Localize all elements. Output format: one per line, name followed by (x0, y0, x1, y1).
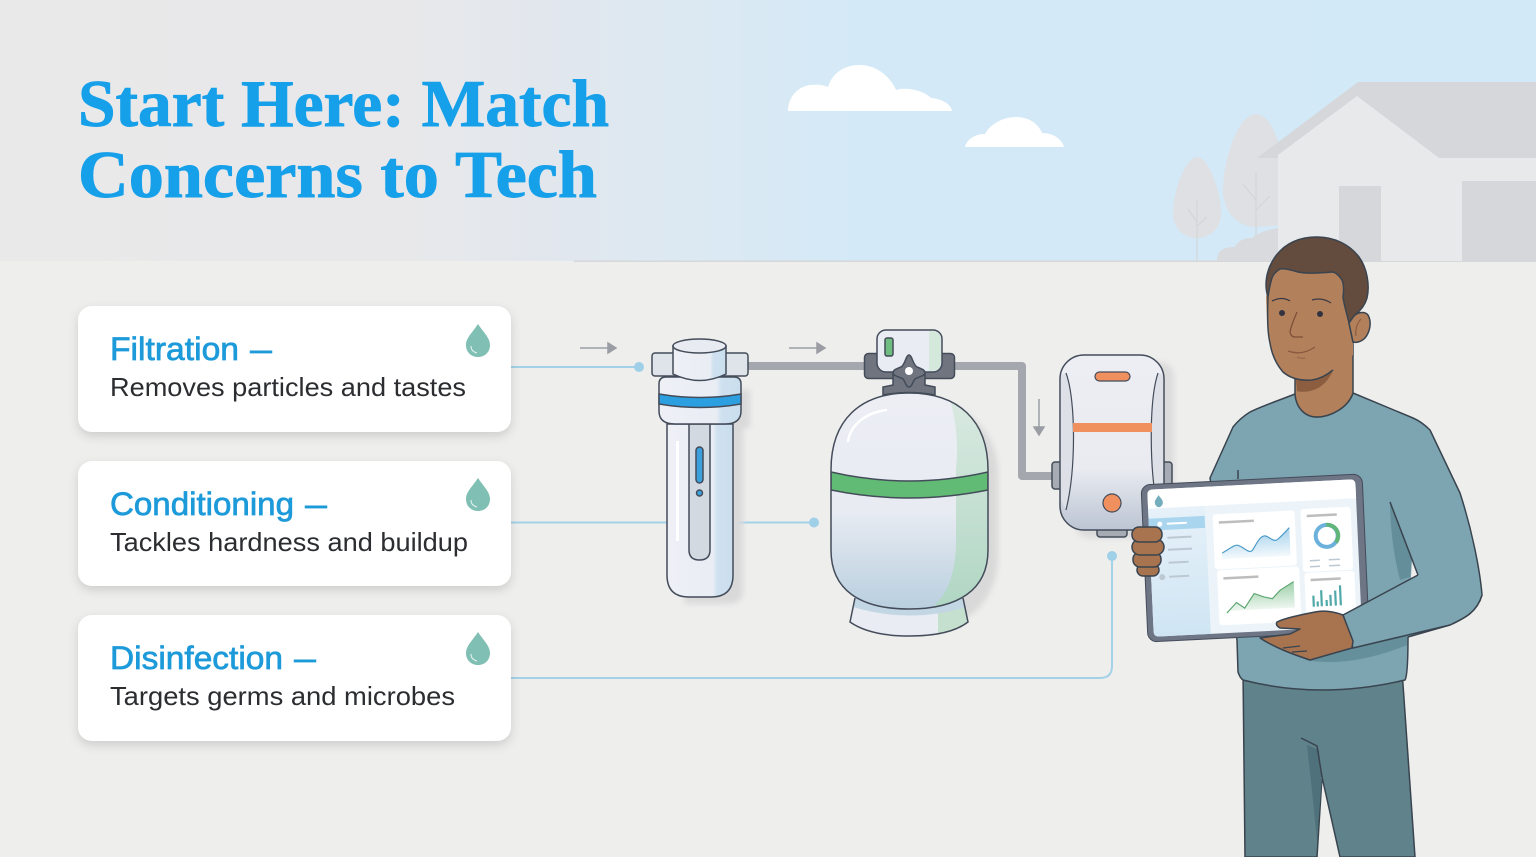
line chart card: green (1217, 566, 1301, 625)
filter cartridge (652, 339, 750, 604)
card: conditioning (78, 461, 511, 586)
tree: tall (1223, 114, 1285, 240)
filter ports (652, 353, 748, 376)
unit orange pill (1095, 372, 1130, 381)
tank highlight (848, 410, 886, 441)
connector: conditioning to softener (511, 518, 819, 528)
unit shadow (1075, 362, 1174, 538)
neck (1295, 335, 1353, 417)
ear inner (1356, 319, 1361, 336)
arrow: down to UV unit (1034, 399, 1044, 435)
house wall (1278, 96, 1536, 261)
cloud: small (965, 117, 1064, 147)
icon: water drop (466, 632, 490, 665)
card heading: — (250, 331, 272, 367)
hair (1266, 237, 1368, 323)
unit body (1060, 355, 1164, 530)
tablet logo drop (1154, 495, 1163, 507)
person (1210, 237, 1482, 857)
icon: water drop (466, 478, 490, 511)
tank base (848, 596, 970, 638)
bar chart card (1304, 571, 1356, 618)
unit bottom tab (1097, 525, 1127, 537)
right hand (1260, 611, 1353, 660)
card body: Targets germs and microbes (110, 681, 455, 711)
bush (1217, 228, 1280, 261)
title: Concerns to Tech (78, 138, 597, 212)
softener tank (831, 330, 998, 638)
card: disinfection (78, 615, 511, 741)
unit orange button (1103, 494, 1121, 512)
tank shadow (950, 405, 998, 625)
unit contour lines (1066, 373, 1158, 510)
card heading: Filtration (110, 331, 239, 367)
tablet sidebar (1148, 506, 1211, 637)
title: Start Here: Match (78, 67, 609, 141)
filter body (667, 424, 733, 597)
tank body (831, 393, 990, 609)
line chart card: blue (1212, 510, 1297, 570)
unit side panels (1061, 373, 1163, 510)
left hand (1132, 527, 1164, 576)
sweater (1210, 393, 1482, 690)
sweater fold (1237, 470, 1239, 479)
neck shadow (1296, 370, 1333, 392)
unit side tabs (1052, 462, 1172, 489)
cloud: large (788, 65, 952, 111)
filter cap (673, 346, 726, 380)
face (1266, 258, 1353, 380)
shadow below hand (1305, 636, 1407, 662)
face outline (1268, 297, 1353, 380)
right arm sleeve (1343, 575, 1482, 648)
house and trees in the background (1173, 82, 1536, 261)
unit orange band (1073, 423, 1152, 432)
tablet header (1147, 479, 1356, 509)
UV unit (1052, 355, 1174, 538)
arrow: into filter (580, 343, 616, 353)
ear (1349, 312, 1370, 342)
arrow: into softener (789, 343, 825, 353)
gap between arm and torso (1411, 558, 1418, 578)
filter collar (659, 377, 741, 424)
sidebar items (1149, 516, 1207, 581)
filter blue band (659, 394, 741, 408)
filter shadow (680, 390, 750, 604)
donut card (1300, 507, 1353, 572)
house roof (1257, 82, 1536, 158)
tablet frame (1141, 474, 1369, 642)
valve (864, 330, 954, 395)
card heading: Conditioning (110, 486, 294, 522)
house door (1339, 186, 1381, 261)
card heading: — (305, 486, 327, 522)
card heading: Disinfection (110, 640, 283, 676)
tablet screen (1147, 479, 1362, 637)
eyes, brows, nose and mouth (1272, 298, 1331, 358)
pants inner seam (1301, 738, 1322, 840)
house garage (1462, 181, 1536, 261)
card heading: — (294, 640, 316, 676)
tree: small (1173, 157, 1221, 261)
pants (1243, 670, 1415, 857)
card: filtration (78, 306, 511, 432)
sweater armpit shadow (1390, 502, 1412, 580)
connector: filtration to filter (511, 362, 644, 372)
tablet dashboard (1141, 474, 1369, 642)
icon: water drop (466, 324, 490, 357)
pipe (748, 366, 1054, 476)
title (78, 67, 609, 212)
connector: disinfection to UV unit (511, 551, 1117, 678)
card body: Removes particles and tastes (110, 372, 466, 402)
card body: Tackles hardness and buildup (110, 527, 468, 557)
sweater armpit line (1390, 502, 1418, 575)
